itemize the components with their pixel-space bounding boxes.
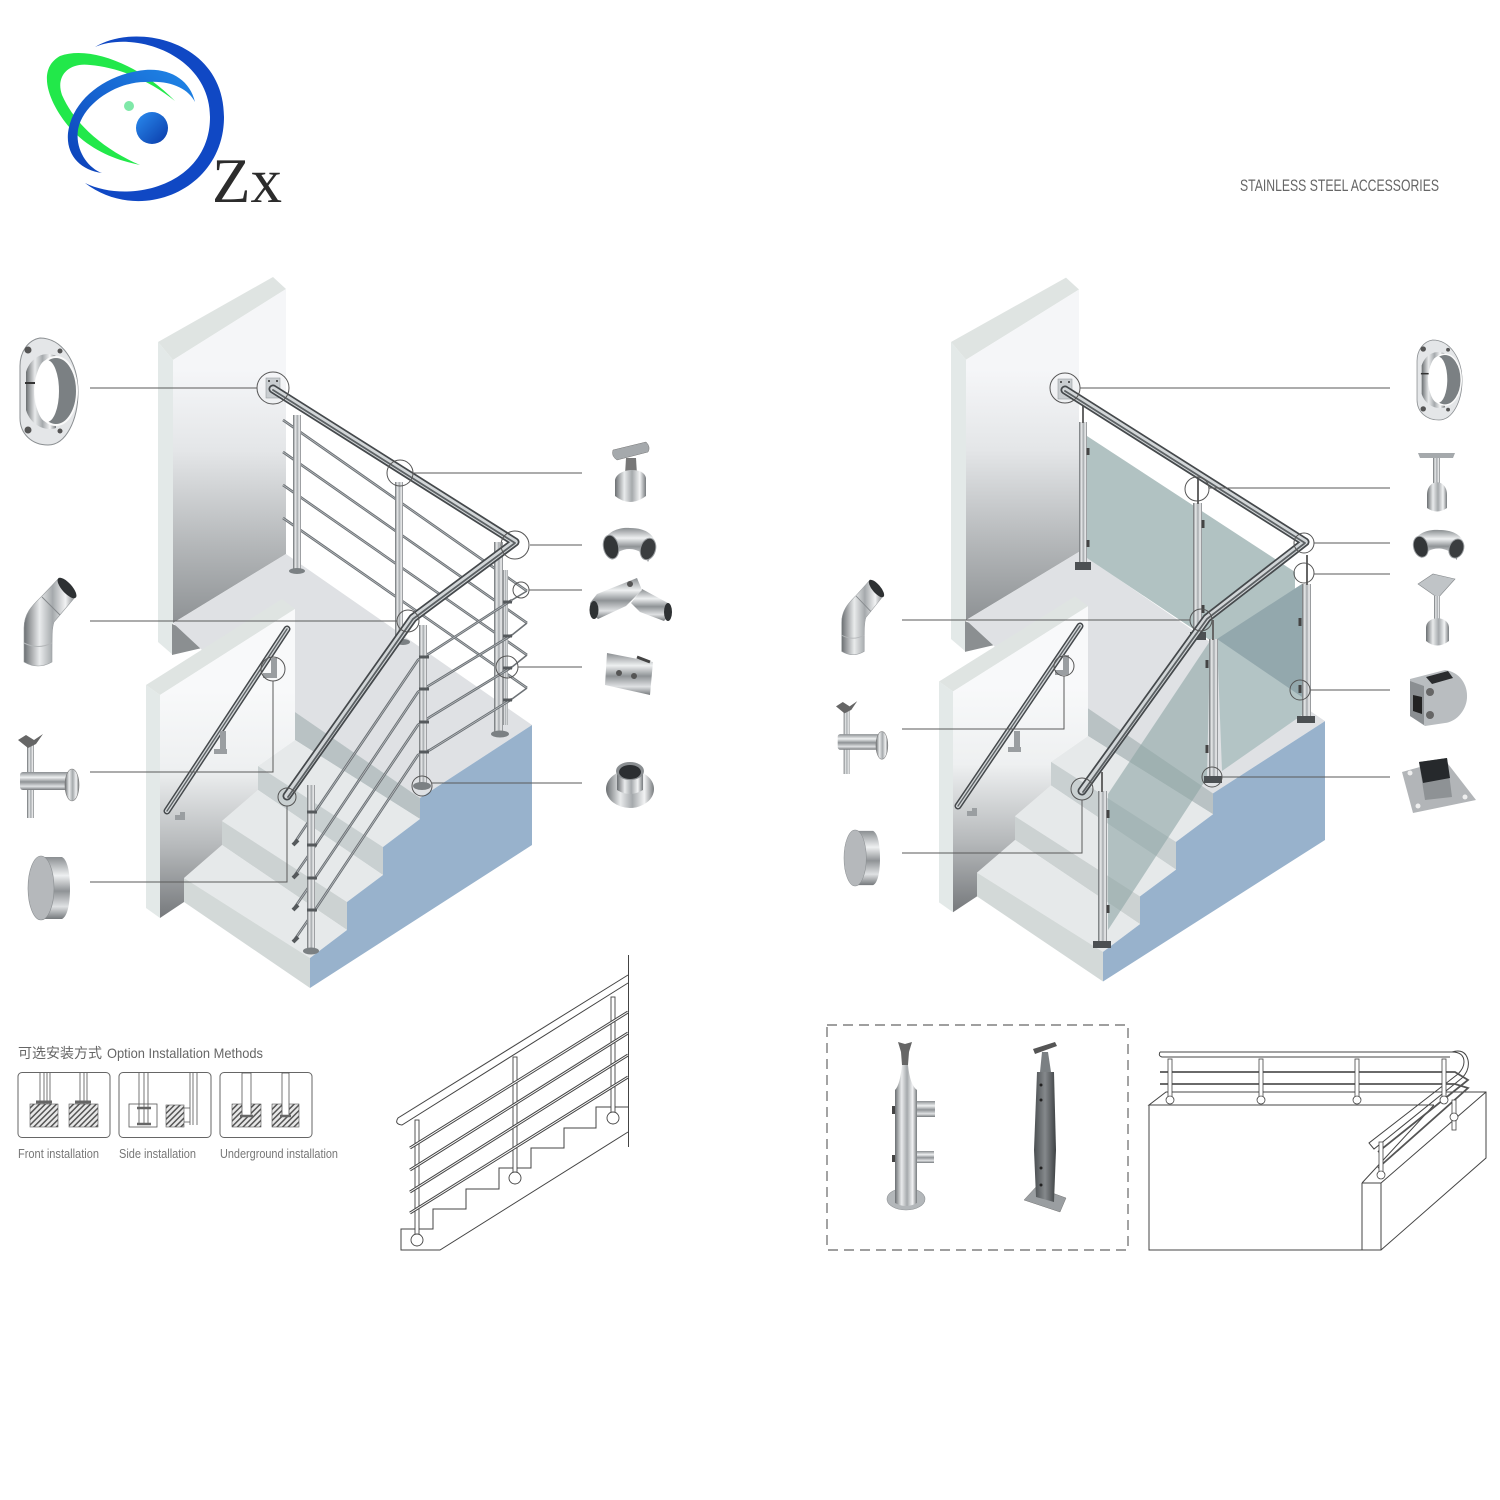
logo: green arc <box>47 53 175 165</box>
rods <box>1160 1072 1468 1168</box>
right posts <box>1075 405 1315 948</box>
left part icon: 45 degree elbow <box>24 575 79 666</box>
top tube <box>1159 1051 1468 1149</box>
right part icon: 45 degree elbow <box>842 577 887 655</box>
logo: blue ball <box>136 112 168 144</box>
left part icon: end cap <box>28 856 70 920</box>
wall plate <box>266 378 280 398</box>
right part icon: glass clamp <box>1410 670 1467 726</box>
right part icon: wall flange <box>1417 340 1462 420</box>
back glass panel <box>1087 436 1295 697</box>
wall plate <box>1058 379 1072 399</box>
square post photo <box>1024 1042 1066 1212</box>
panel: dashed post samples <box>827 1025 1128 1250</box>
callout circles <box>1050 373 1314 800</box>
logo: small green dot <box>124 101 134 111</box>
caption: underground installation: Underground installation <box>220 1146 338 1161</box>
rod clamps <box>307 602 512 910</box>
callout circles <box>257 372 529 806</box>
left part icon: 90 degree elbow <box>601 528 658 562</box>
wall-mounted handrail <box>167 629 287 820</box>
installation methods heading <box>18 1045 263 1061</box>
left part icon: post base flange <box>606 762 654 808</box>
right part icon: wall bracket <box>836 701 888 774</box>
line drawing: stair railing <box>397 955 628 1250</box>
logo: outer blue ring <box>85 36 224 201</box>
upper posts <box>289 415 509 738</box>
round post photo <box>887 1042 935 1210</box>
installation methods heading: 可选安装方式 <box>18 1045 102 1061</box>
right part icon: end cap <box>844 830 880 886</box>
stair glass panel <box>1108 641 1210 930</box>
left staircase scene <box>90 277 582 988</box>
right staircase base <box>939 278 1325 982</box>
logo <box>47 36 282 216</box>
left part icon: wall bracket <box>18 734 79 818</box>
left part icon: saddle support <box>612 442 649 502</box>
posts <box>1166 1059 1458 1179</box>
return glass panel <box>1217 584 1302 771</box>
logo: inner blue arc <box>68 70 195 173</box>
right part icon: corner saddle support <box>1418 574 1455 646</box>
left staircase base <box>146 277 532 988</box>
panel: front installation <box>18 1072 110 1138</box>
caption: front installation: Front installation <box>18 1146 99 1161</box>
stair outline <box>401 955 628 1250</box>
right staircase scene <box>902 278 1390 982</box>
callout lines <box>90 388 582 882</box>
logo: Zx lettering: Zx <box>212 146 282 216</box>
horizontal rods <box>410 1012 628 1213</box>
lower cross rods <box>295 591 527 939</box>
left part icon: wall flange <box>20 338 78 445</box>
handrail <box>1065 390 1305 792</box>
installation methods heading: Option Installation Methods <box>107 1045 263 1061</box>
right part icon: 90 degree elbow <box>1411 530 1466 560</box>
line drawing: balcony railing <box>1149 1051 1486 1250</box>
posts <box>411 997 619 1246</box>
lower posts <box>303 625 431 954</box>
glass clamps <box>1088 448 1300 913</box>
right part icon: T saddle support <box>1418 453 1455 512</box>
wall-mounted handrail <box>958 626 1080 816</box>
right part icon: square base plate <box>1402 758 1476 813</box>
caption: side installation: Side installation <box>119 1146 196 1161</box>
left part icon: tube connector <box>605 653 653 695</box>
panel: side installation <box>119 1072 211 1138</box>
upper cross rods <box>283 420 527 688</box>
left part icon: tee connector <box>590 578 672 621</box>
panel: underground installation <box>220 1072 312 1138</box>
handrail <box>273 389 515 797</box>
callout lines <box>902 388 1390 853</box>
handrail <box>397 975 628 1125</box>
return glass overlap <box>1217 584 1302 697</box>
rod tips <box>293 840 298 942</box>
parapet wall <box>1149 1092 1486 1250</box>
